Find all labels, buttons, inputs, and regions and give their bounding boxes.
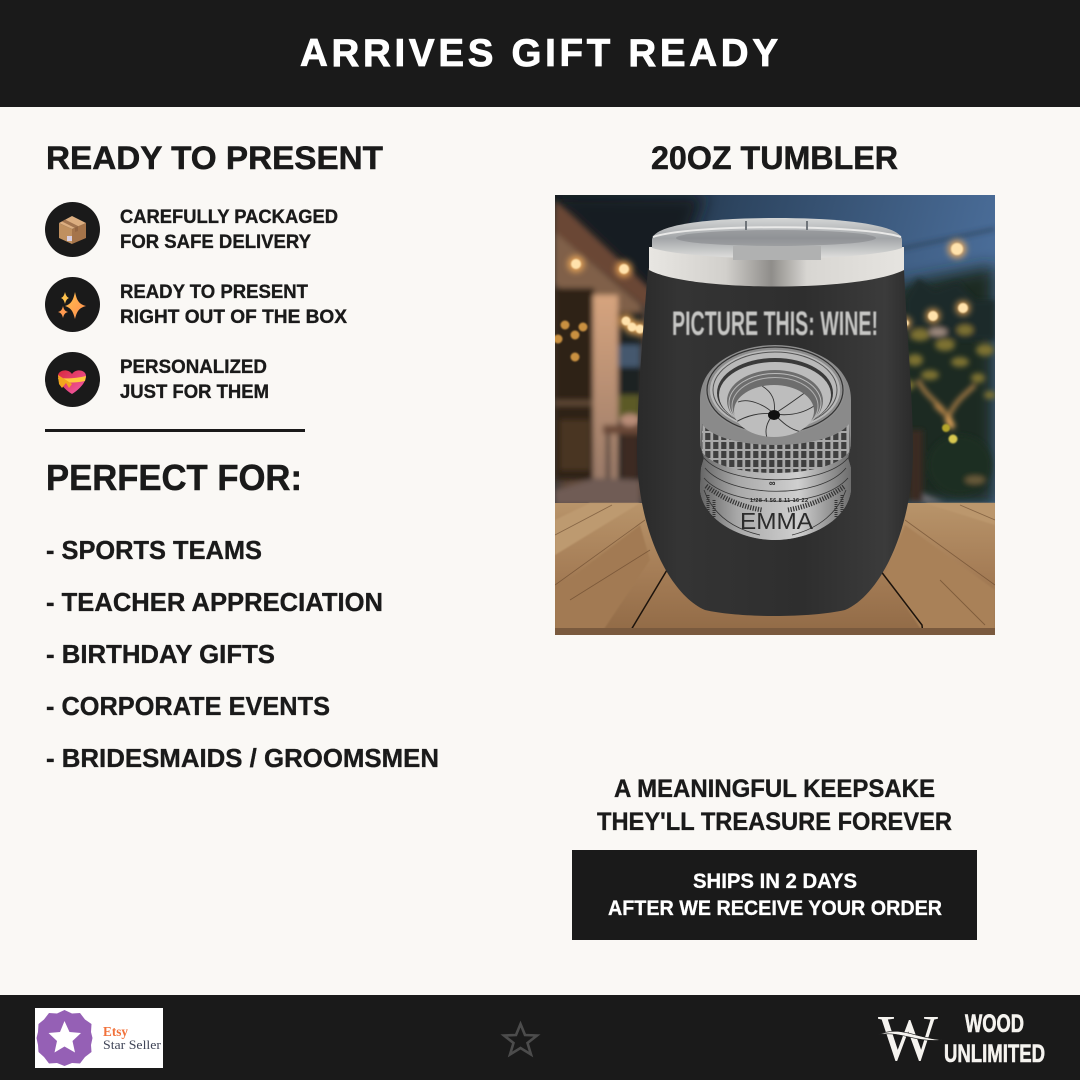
lens scale numbers: 1/28 4 56 8 11 16 22: [750, 498, 808, 504]
heading: perfect for: PERFECT FOR:: [46, 457, 302, 498]
logo mark: W: W: [878, 1002, 939, 1075]
engraved name: EMMA: [740, 508, 814, 534]
list of occasions: - BIRTHDAY GIFTS: [46, 639, 275, 669]
icon: purple rosette: [36, 1010, 92, 1066]
keepsake message: [597, 775, 952, 836]
benefit row: ready out of box: RIGHT OUT OF THE BOX: [120, 307, 347, 328]
callout: shipping time: [572, 850, 977, 940]
icon: sparkles: [58, 292, 86, 319]
logo: Wood Unlimited: [878, 1002, 1045, 1075]
heading: product name: 20OZ TUMBLER: [651, 140, 898, 176]
steel rim: [649, 247, 904, 286]
lens infinity mark: ∞: [769, 478, 776, 488]
logo: Wood Unlimited: WOOD: [965, 1010, 1024, 1038]
footer bar: [0, 995, 1080, 1080]
list of occasions: - SPORTS TEAMS: [46, 535, 262, 565]
panel: perfect for: [46, 457, 439, 773]
list of occasions: - TEACHER APPRECIATION: [46, 587, 383, 617]
badge: Etsy star seller: Etsy: [103, 1024, 128, 1039]
callout: shipping time: SHIPS IN 2 DAYS: [693, 870, 857, 893]
wooden table top: [555, 503, 995, 635]
badge: Etsy star seller: [35, 1008, 163, 1068]
benefit row: ready out of box: READY TO PRESENT: [120, 282, 308, 303]
engraved slogan: PICTURE THIS: WINE!: [672, 305, 878, 343]
logo: Wood Unlimited: UNLIMITED: [944, 1040, 1045, 1068]
benefit row: personalized: PERSONALIZED: [120, 357, 267, 378]
benefit row: packaging: [45, 202, 338, 257]
photo background: patio at dusk: [555, 195, 996, 505]
aperture blades: [734, 385, 814, 440]
badge: Etsy star seller: Star Seller: [103, 1037, 162, 1052]
icon: outline star: [504, 1024, 537, 1054]
callout: shipping time: AFTER WE RECEIVE YOUR ORDER: [608, 897, 942, 920]
tumbler body: [637, 268, 913, 616]
benefit row: packaging: FOR SAFE DELIVERY: [120, 232, 311, 253]
heading: ready to present: READY TO PRESENT: [46, 140, 383, 176]
benefit row: ready out of box: [45, 277, 347, 332]
icon: gift heart: [58, 370, 86, 394]
header banner: [0, 0, 1080, 107]
engraved camera lens: [700, 345, 851, 540]
benefit row: personalized: JUST FOR THEM: [120, 382, 269, 403]
benefit row: personalized: [45, 352, 269, 407]
lens distance scale: [704, 458, 848, 535]
keepsake message: A MEANINGFUL KEEPSAKE: [614, 775, 935, 803]
title: ARRIVES GIFT READY: [300, 32, 778, 75]
keepsake message: THEY'LL TREASURE FOREVER: [597, 808, 952, 836]
clear lid: [652, 218, 902, 260]
benefit row: packaging: CAREFULLY PACKAGED: [120, 207, 338, 228]
product photo: [554, 195, 996, 635]
list of occasions: - BRIDESMAIDS / GROOMSMEN: [46, 743, 439, 773]
list of occasions: - CORPORATE EVENTS: [46, 691, 330, 721]
icon: parcel box: [59, 216, 86, 244]
list of occasions: [46, 535, 439, 773]
panel: ready to present: [45, 140, 383, 407]
string lights: [554, 240, 970, 444]
tumbler: [637, 218, 913, 616]
